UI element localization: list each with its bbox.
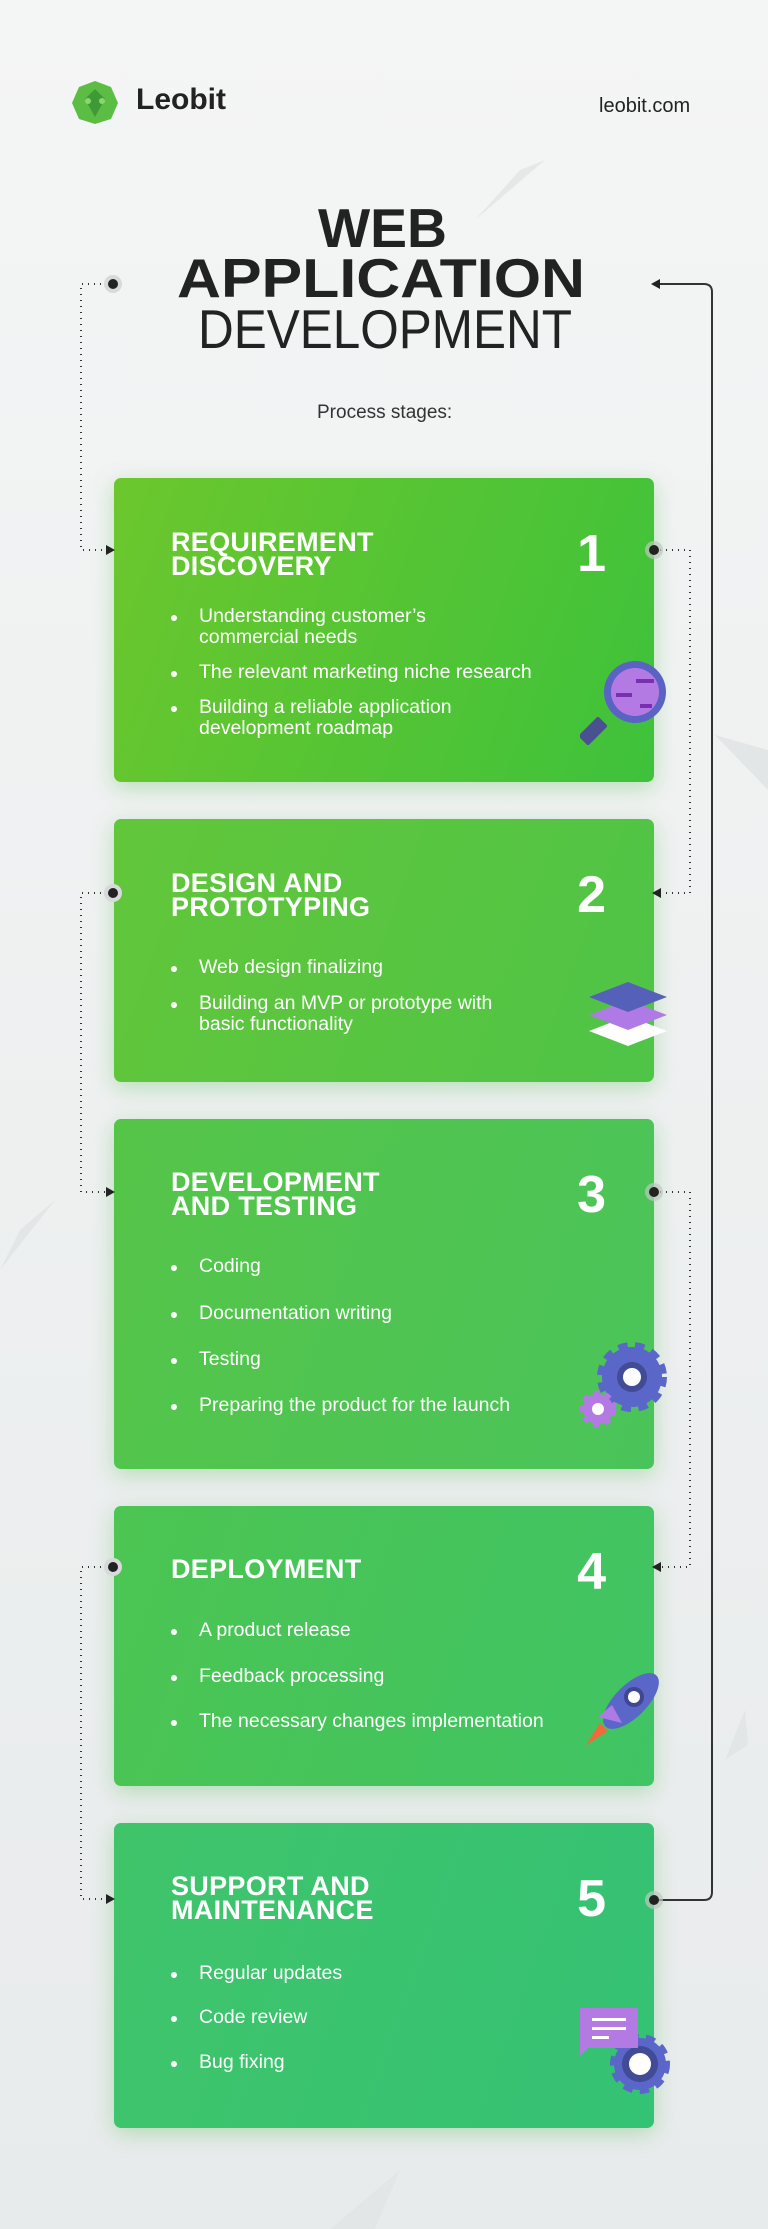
icon: layers [589, 982, 667, 1046]
panel: support and maintenance: MAINTENANCE [171, 1895, 374, 1925]
panel: support and maintenance: 5 [577, 1870, 606, 1928]
title: APPLICATION [177, 247, 585, 309]
panel: support and maintenance: SUPPORT AND [171, 1871, 370, 1901]
panel: design and prototyping: basic functionality [199, 1013, 353, 1035]
panel: deployment: Feedback processing [199, 1665, 384, 1687]
panel: development and testing: Coding [199, 1255, 261, 1277]
subtitle: Process stages: [317, 402, 452, 423]
icon: chat and gear [580, 2008, 670, 2094]
bullets: commercial needs [199, 626, 357, 648]
heading [171, 527, 374, 581]
panel: deployment: The necessary changes implementation [199, 1710, 544, 1732]
panel: development and testing: Preparing the product for the launch [199, 1394, 510, 1416]
panel: requirement discovery: Building a reliable application [199, 696, 452, 718]
icon: leobit logo [72, 81, 118, 124]
panel: development and testing: 3 [577, 1166, 606, 1224]
panel: deployment: 4 [577, 1543, 606, 1601]
panel: support and maintenance [114, 1823, 654, 2128]
panel: requirement discovery [114, 478, 654, 782]
panel: deployment: A product release [199, 1619, 351, 1641]
panel: design and prototyping: 2 [577, 866, 606, 924]
number: 1 [577, 525, 606, 583]
panel: development and testing: AND TESTING [171, 1191, 357, 1221]
title [177, 200, 585, 355]
website: leobit.com [599, 95, 690, 117]
icon: magnifier [580, 661, 666, 746]
logo: Leobit [136, 83, 226, 116]
panel: design and prototyping: Web design finalizing [199, 956, 383, 978]
heading: DISCOVERY [171, 551, 332, 581]
panel: development and testing: DEVELOPMENT [171, 1167, 380, 1197]
icon: gears [580, 1342, 667, 1428]
panel: support and maintenance: Regular updates [199, 1962, 342, 1984]
panel: development and testing: Testing [199, 1348, 261, 1370]
panel: requirement discovery: The relevant marketing niche research [199, 661, 532, 683]
panel: deployment [114, 1506, 654, 1786]
panel: deployment: DEPLOYMENT [171, 1554, 362, 1584]
panel: design and prototyping: PROTOTYPING [171, 892, 370, 922]
panel: requirement discovery: development roadmap [199, 717, 393, 739]
bullets [199, 606, 426, 648]
panel: development and testing [114, 1119, 654, 1469]
panel: design and prototyping: DESIGN AND [171, 868, 343, 898]
panel: support and maintenance: Bug fixing [199, 2051, 285, 2073]
panel: design and prototyping: Building an MVP or prototype with [199, 992, 492, 1014]
icon: rocket [586, 1673, 659, 1745]
logo [72, 81, 226, 124]
panel: support and maintenance: Code review [199, 2006, 307, 2028]
panel: development and testing: Documentation writing [199, 1302, 392, 1324]
panel: design and prototyping [114, 819, 654, 1082]
bullets: Understanding customer’s [199, 605, 426, 627]
heading: REQUIREMENT [171, 527, 374, 557]
